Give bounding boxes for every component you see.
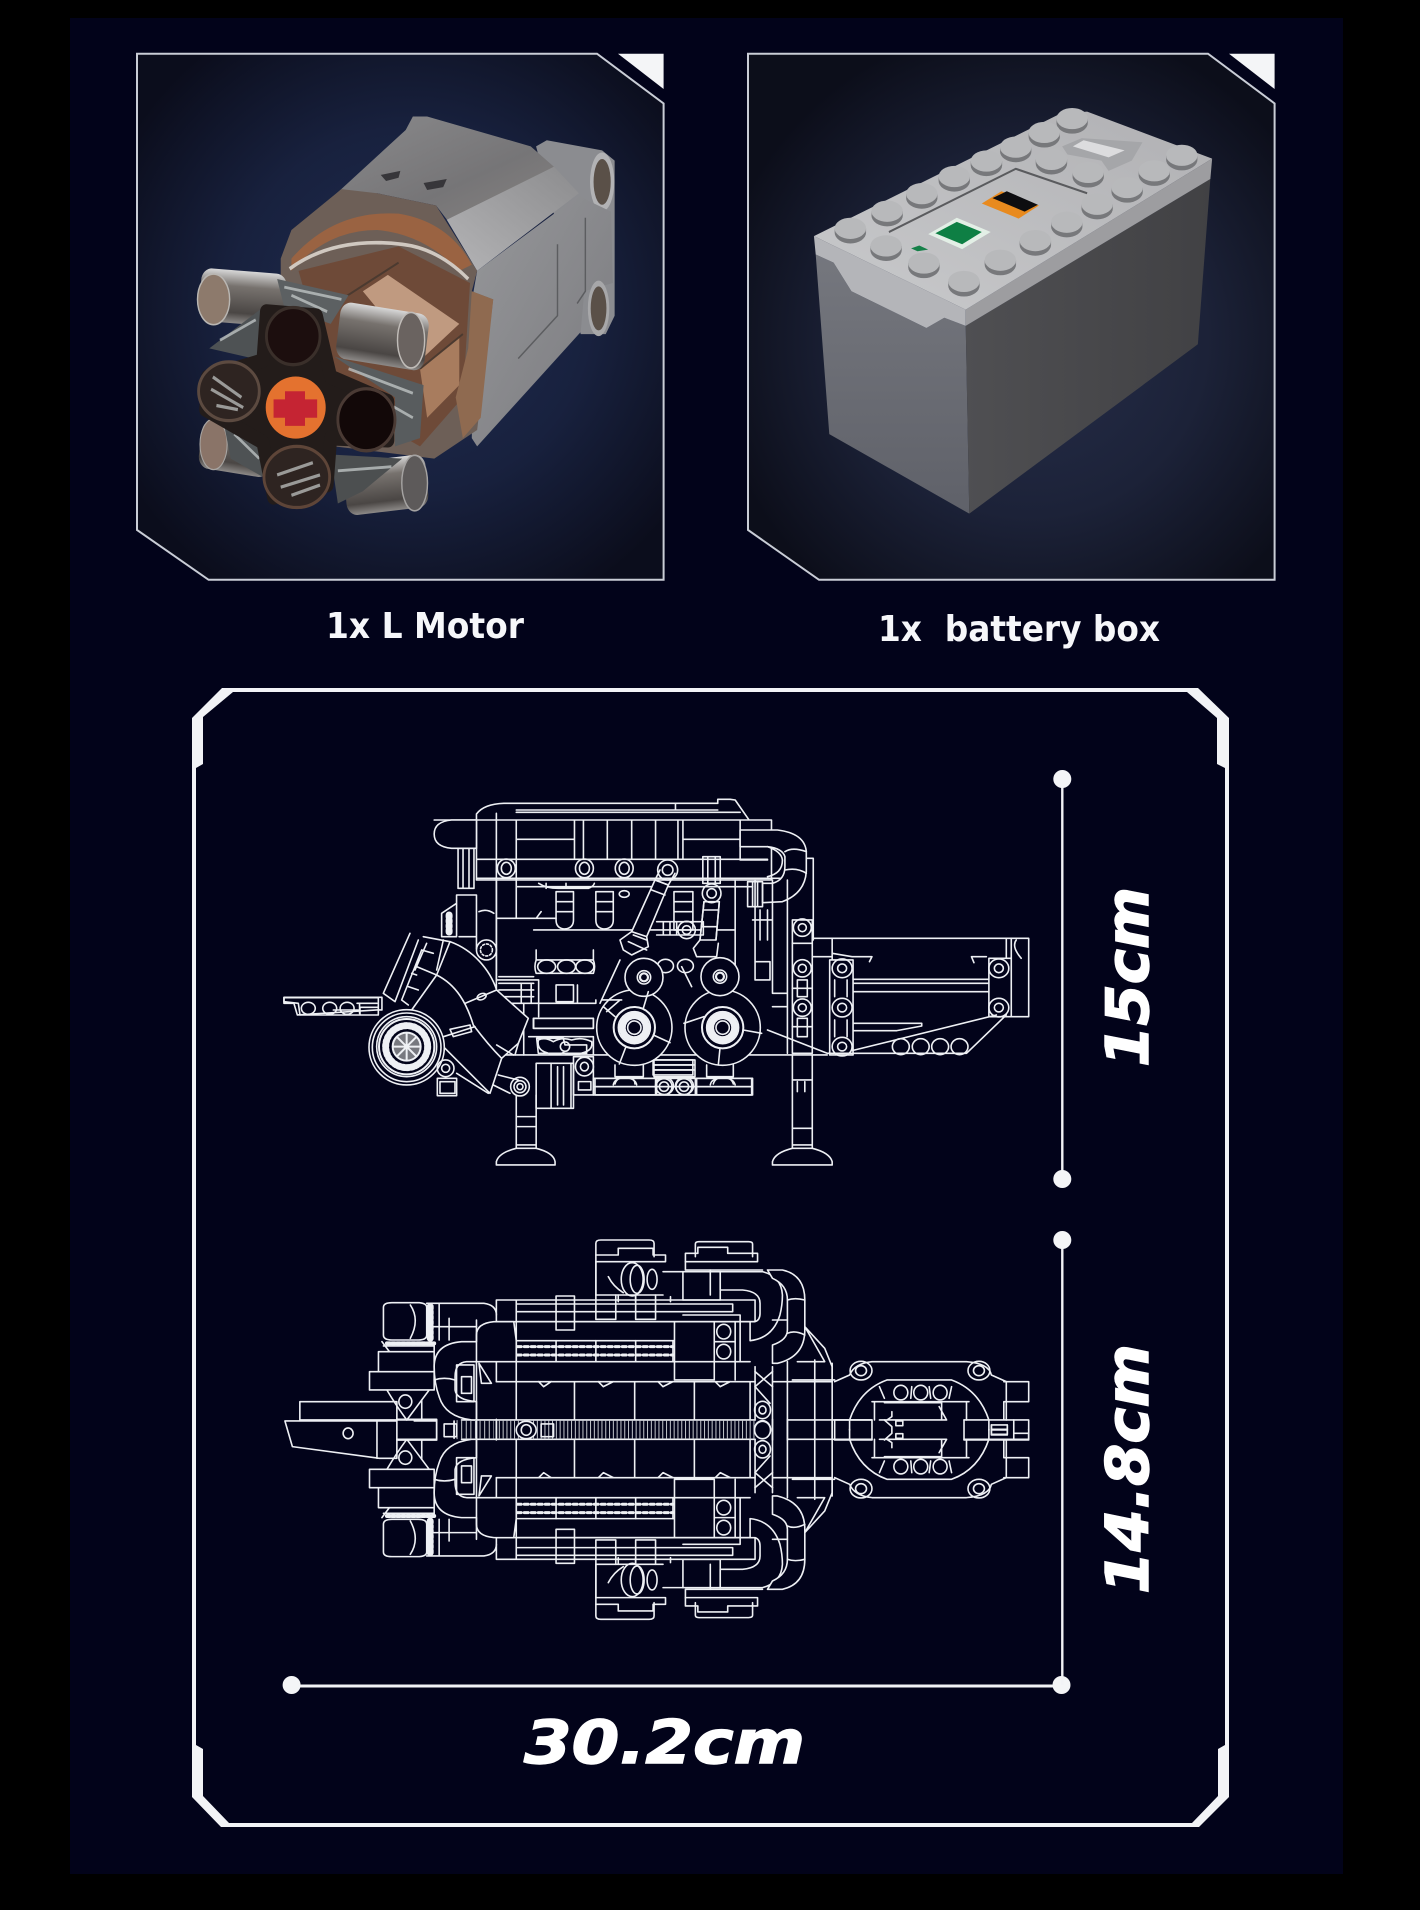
- corner triangle: battery: [1229, 54, 1275, 89]
- dimension line: depth 14.8cm: [1053, 1231, 1071, 1685]
- panel frame: motor: [137, 54, 664, 580]
- icon: L motor illustration: [197, 117, 615, 516]
- corner triangle: motor: [618, 54, 664, 89]
- dimension value: 30.2cm: 30.2cm: [524, 1708, 805, 1778]
- panel: L motor: [137, 54, 664, 580]
- panel: dimensions frame: [192, 688, 1229, 1827]
- label: battery box: 1x battery box: [878, 609, 1160, 650]
- label: L motor: 1x L Motor: [326, 606, 524, 647]
- icon: battery box illustration: [814, 108, 1212, 514]
- dimension value: 15cm: 15cm: [1093, 887, 1162, 1067]
- glass hub pieces: [206, 279, 424, 503]
- dimension value: 14.8cm: 14.8cm: [1093, 1344, 1162, 1594]
- side view line drawing of engine: [284, 799, 1029, 1165]
- dimension line: width: [283, 1676, 1071, 1694]
- pulleys and crank wheels: [533, 860, 762, 1095]
- dimension line: height 15cm: [1053, 770, 1071, 1188]
- battery studs: [835, 108, 1197, 297]
- motor tubes: [197, 268, 430, 516]
- turbo wheel and curved duct: [284, 933, 529, 1096]
- top view line drawing of engine: [285, 1240, 1029, 1619]
- panel frame: battery: [748, 54, 1275, 580]
- copper windings: [281, 189, 493, 459]
- panel: battery box: [748, 54, 1275, 580]
